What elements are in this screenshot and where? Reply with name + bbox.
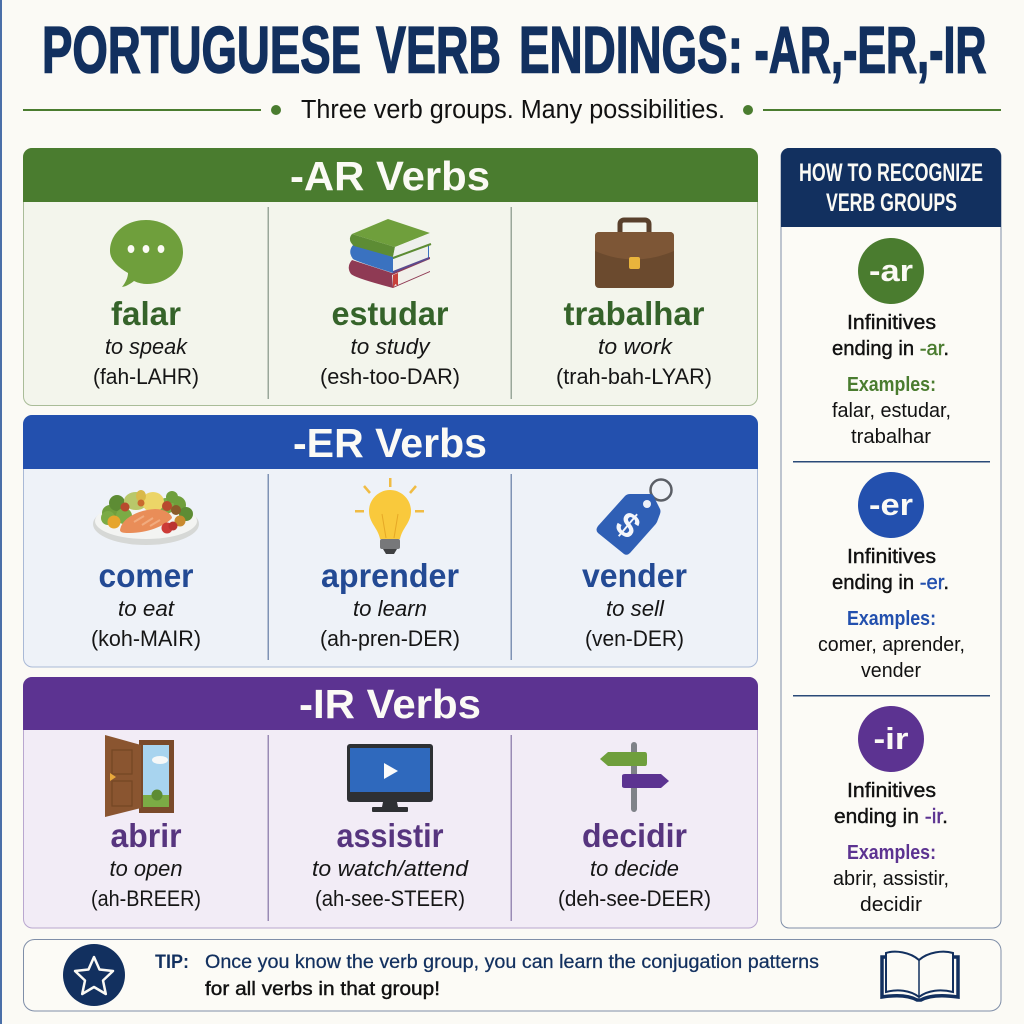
sidebar item: -ar: falar, estudar, [832, 400, 951, 422]
sidebar item: -ir: ending in -ir. [834, 806, 948, 828]
subtitle with divider [23, 96, 1001, 124]
word: trabalhar [556, 295, 712, 389]
word: assistir: (ah-see-STEER) [315, 886, 465, 911]
sidebar item: -er: -er [869, 487, 913, 522]
panel: -ER verbs: -ER Verbs [293, 420, 487, 466]
panel: -AR verbs: -AR Verbs [290, 153, 490, 199]
word: decidir: decidir [582, 817, 687, 854]
sidebar item: -er: Infinitives [847, 546, 936, 568]
word: decidir: (deh-see-DEER) [558, 886, 711, 911]
word: comer: comer [98, 557, 194, 594]
word: estudar: estudar [332, 295, 449, 332]
sidebar heading: VERB GROUPS [826, 189, 957, 217]
sidebar item: -er: comer, aprender, [818, 634, 965, 656]
sidebar item: -ar: trabalhar [851, 426, 931, 448]
icon: open door [105, 735, 174, 817]
icon: speech bubble [110, 220, 183, 287]
word: decidir: to decide [590, 856, 679, 881]
word: vender: to sell [606, 596, 665, 621]
word: trabalhar: (trah-bah-LYAR) [556, 364, 712, 389]
sidebar item: -ir: abrir, assistir, [833, 868, 949, 890]
word: trabalhar: to work [598, 334, 673, 359]
word: falar [93, 295, 199, 389]
word: vender: vender [582, 557, 687, 594]
tip text: Once you know the verb group, you can learn the conjugation patterns [205, 952, 819, 973]
word: aprender: to learn [353, 596, 427, 621]
panel: -IR verbs [23, 677, 758, 928]
word: abrir: abrir [110, 817, 182, 854]
tip text: for all verbs in that group! [205, 979, 440, 1000]
sidebar item: -er: vender [861, 660, 921, 682]
sidebar item: -ir: Examples: [847, 842, 936, 864]
panel: -IR verbs: -IR Verbs [299, 681, 481, 727]
subtitle with divider: Three verb groups. Many possibilities. [301, 96, 725, 124]
panel: -AR verbs [23, 148, 758, 406]
word: estudar: (esh-too-DAR) [320, 364, 460, 389]
sidebar item: -ar: -ar [869, 253, 913, 288]
sidebar item: -er: Examples: [847, 608, 936, 630]
icon: signpost [600, 742, 669, 812]
word: decidir [558, 817, 711, 911]
title [42, 12, 986, 86]
word: abrir [91, 817, 201, 911]
title: PORTUGUESE [42, 12, 361, 86]
tip text: TIP: [155, 952, 189, 973]
word: vender [582, 557, 687, 651]
icon: books [349, 219, 431, 288]
tip text [155, 952, 819, 1000]
word: abrir: (ah-BREER) [91, 886, 201, 911]
sidebar item: -ir: -ir [874, 721, 908, 756]
word: assistir [312, 817, 469, 911]
sidebar heading [799, 159, 983, 217]
sidebar item: -ar: Examples: [847, 374, 936, 396]
icon: price tag [596, 480, 672, 555]
sidebar item: -ir: decidir [860, 894, 922, 916]
word: estudar [320, 295, 460, 389]
title: VERB [376, 12, 501, 86]
word: trabalhar: trabalhar [564, 295, 705, 332]
word: falar: (fah-LAHR) [93, 364, 199, 389]
word: aprender: aprender [321, 557, 459, 594]
sidebar item: -er: ending in -er. [832, 572, 949, 594]
word: falar: falar [111, 295, 181, 332]
panel: -ER verbs [23, 415, 758, 667]
word: comer: to eat [118, 596, 175, 621]
icon: price tag: $ [608, 504, 648, 547]
icon: open book [882, 952, 958, 1000]
icon: light bulb [355, 478, 424, 554]
icon: briefcase [595, 220, 674, 288]
icon: monitor with play button [347, 744, 433, 812]
icon: salad plate [93, 490, 199, 545]
icon: star badge [63, 944, 125, 1006]
panel: how to recognize verb groups [781, 148, 1001, 928]
word: comer [91, 557, 201, 651]
sidebar item: -ir: Infinitives [847, 780, 936, 802]
sidebar item: -ar: ending in -ar. [832, 338, 949, 360]
word: aprender [320, 557, 460, 651]
sidebar item: -er [818, 472, 965, 682]
word: assistir: assistir [336, 817, 444, 854]
word: abrir: to open [110, 856, 182, 881]
sidebar item: -ir [833, 706, 949, 916]
word: estudar: to study [350, 334, 432, 359]
word: comer: (koh-MAIR) [91, 626, 201, 651]
sidebar item: -ar [832, 238, 951, 448]
sidebar item: -ar: Infinitives [847, 312, 936, 334]
word: vender: (ven-DER) [585, 626, 684, 651]
tip box [24, 940, 1001, 1011]
word: falar: to speak [105, 334, 188, 359]
title: ENDINGS: [519, 12, 743, 86]
word: assistir: to watch/attend [312, 856, 469, 881]
word: aprender: (ah-pren-DER) [320, 626, 460, 651]
